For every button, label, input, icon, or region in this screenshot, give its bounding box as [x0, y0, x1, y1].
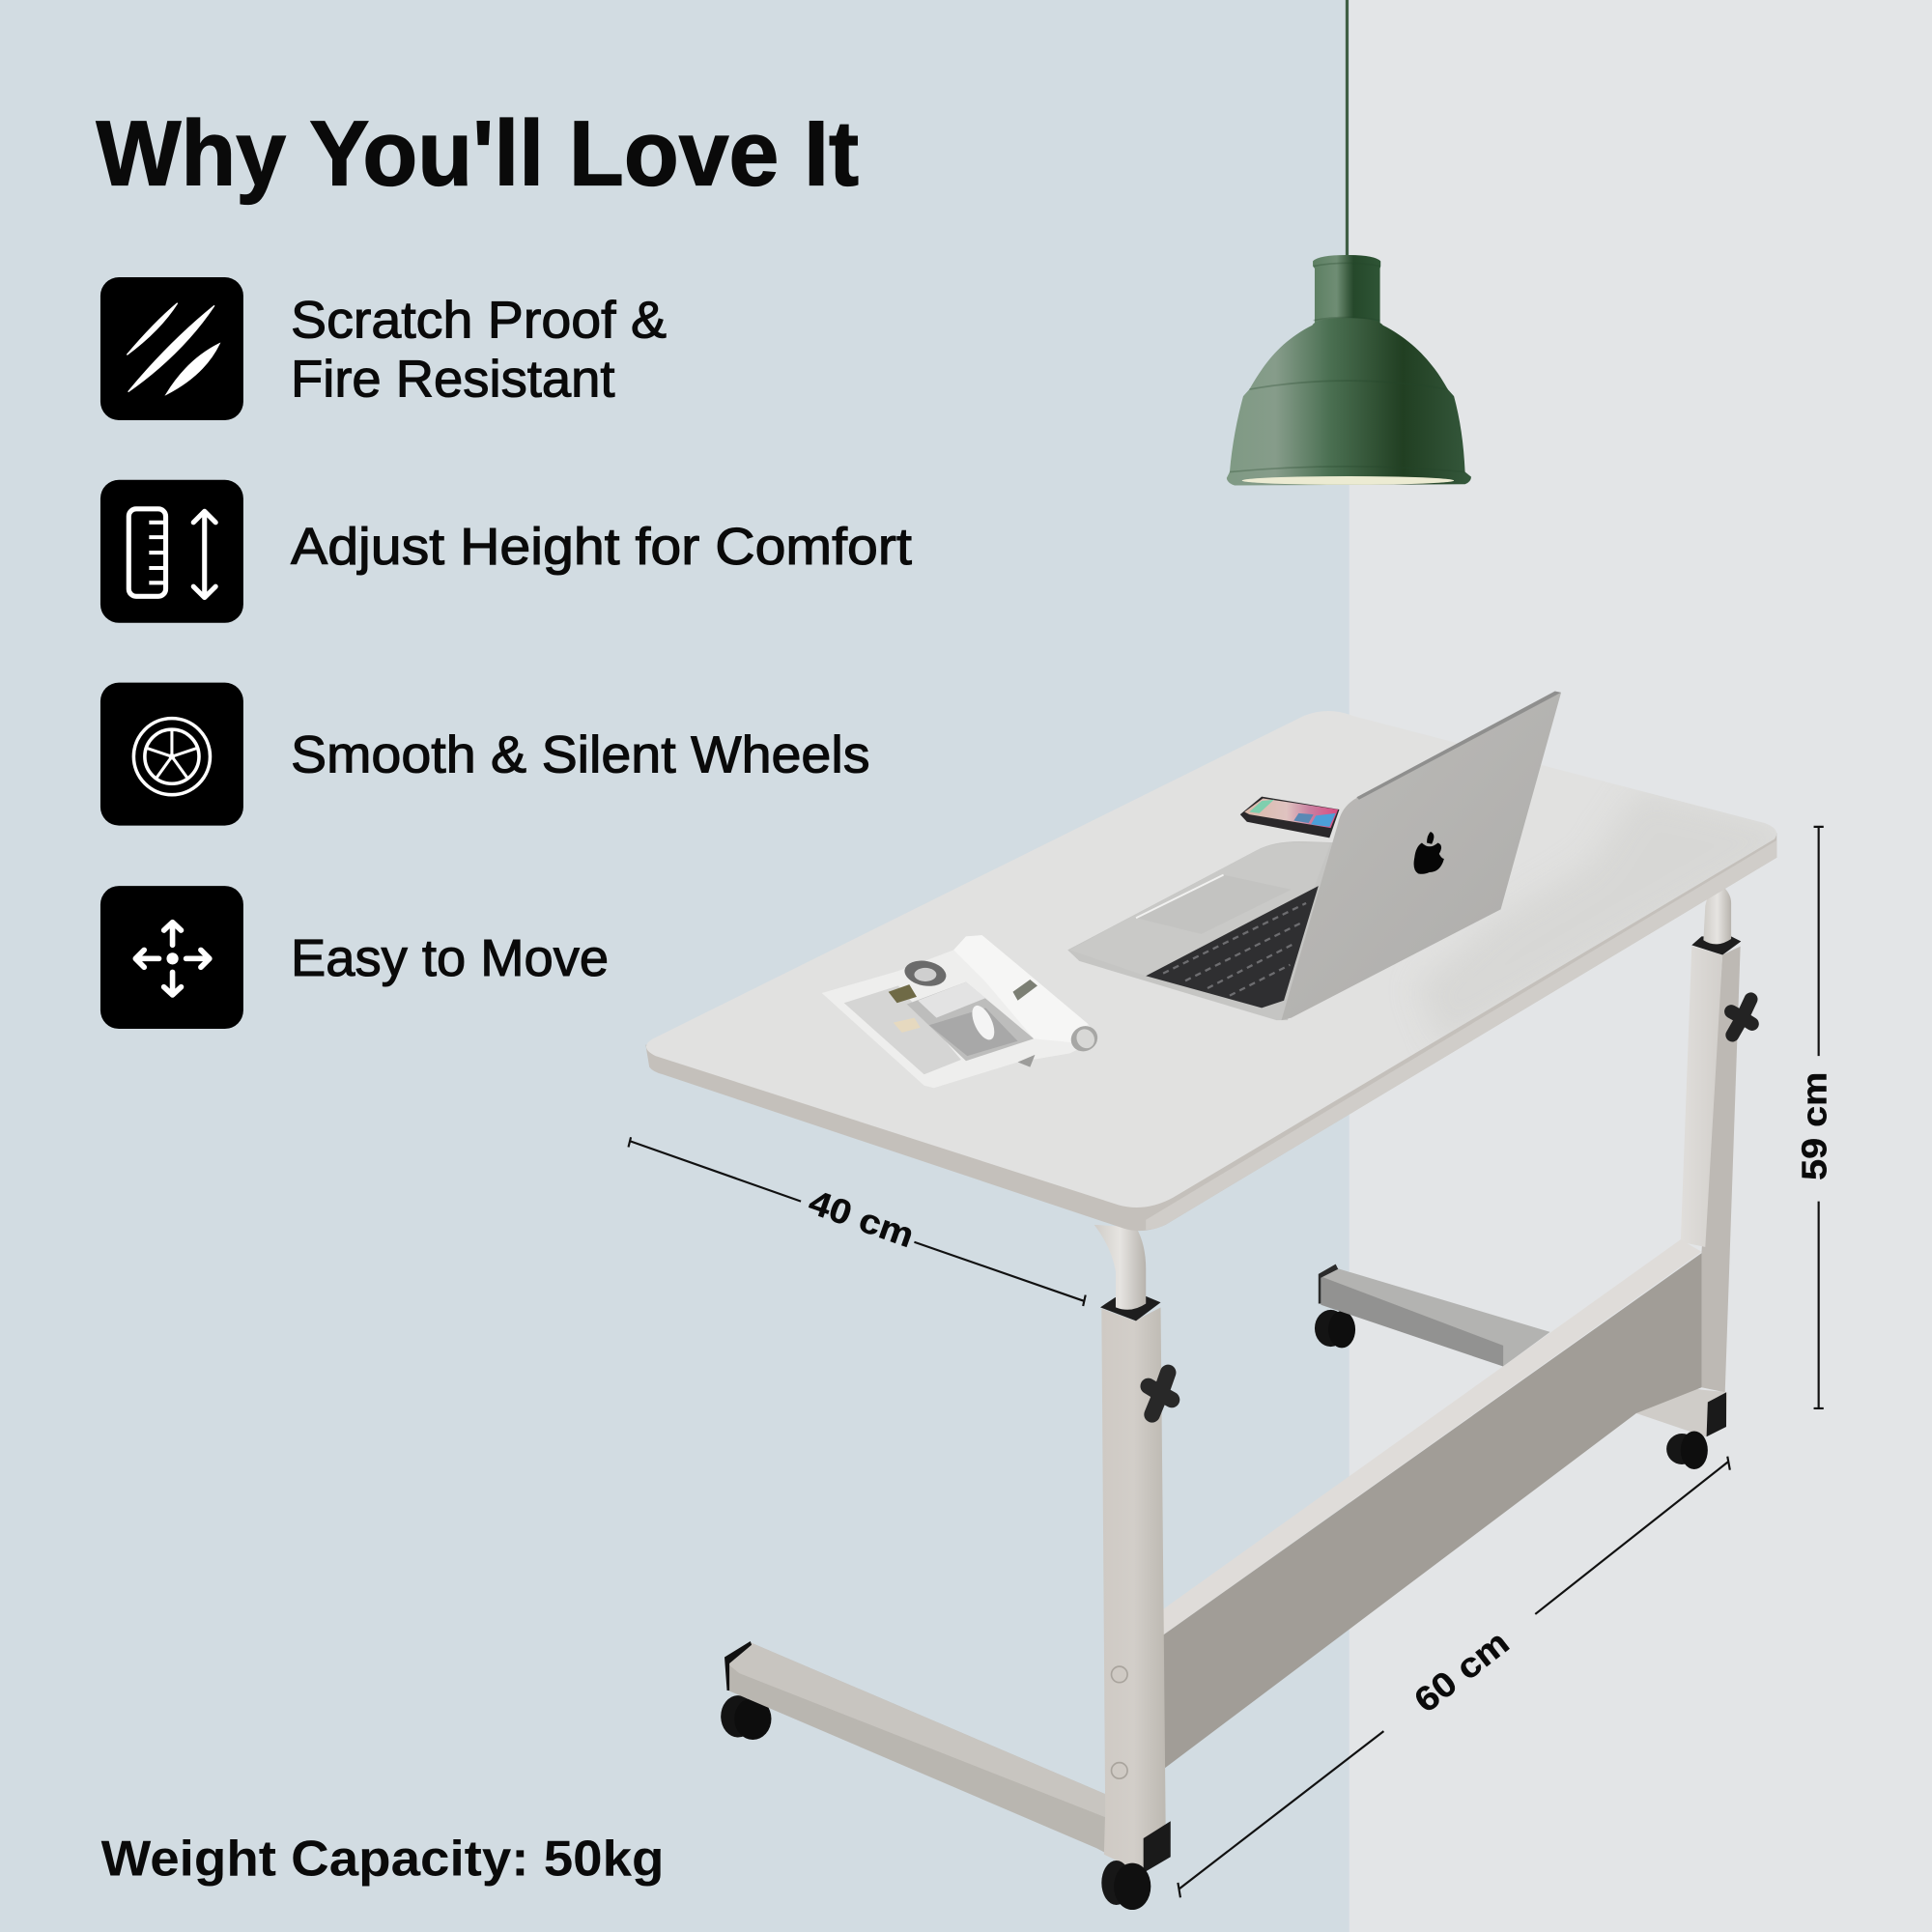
feature: scratch proof — [100, 277, 667, 420]
icon: scratches — [100, 277, 243, 420]
feature text: scratch proof and fire resistant — [291, 292, 667, 409]
title: Why You'll Love It — [96, 101, 859, 205]
right leg knob — [1731, 999, 1752, 1035]
dimension: 40 cm: 40 cm — [804, 1182, 919, 1255]
table surface — [646, 711, 1776, 1208]
dimension: 60 cm: 60 cm — [1406, 1623, 1517, 1720]
feature: wheels — [100, 683, 870, 826]
lamp neck — [1313, 255, 1380, 323]
feature: adjustable height — [100, 480, 912, 623]
bolts — [1112, 1666, 1127, 1683]
table top — [645, 711, 1786, 1231]
table edge — [645, 833, 1776, 1231]
background: light grey right panel — [1350, 0, 1932, 1932]
laptop lid — [1282, 693, 1561, 1020]
weight capacity note: Weight Capacity: 50kg — [101, 1831, 664, 1887]
front leg knob — [1149, 1373, 1172, 1414]
lamp shade — [1227, 318, 1471, 486]
apple logo — [1414, 832, 1444, 874]
front crossbeam — [1163, 1239, 1701, 1770]
dimension: 59 cm — [1795, 827, 1833, 1408]
rear telescopic tube and cap — [1691, 887, 1741, 955]
table surface reflection — [1435, 806, 1768, 1024]
lamp cord — [1346, 0, 1349, 256]
dimension: 40 cm — [629, 1137, 1086, 1306]
icon: wheel — [100, 683, 243, 826]
desk illustration — [645, 692, 1786, 1910]
lamp light — [1242, 476, 1454, 485]
laptop base — [1067, 841, 1343, 1020]
icon: four-way arrows — [100, 886, 243, 1029]
dimension: 60 cm — [1178, 1457, 1730, 1897]
feature text: easy to move: Easy to Move — [291, 930, 609, 987]
front floor bar and caster — [721, 1641, 1144, 1873]
feature: easy to move — [100, 886, 609, 1029]
laptop — [1067, 692, 1561, 1020]
phone — [1240, 797, 1339, 838]
feature list — [100, 277, 912, 1029]
back crossbar and caster — [1315, 1264, 1550, 1367]
keyboard — [1146, 886, 1319, 1008]
dimension: 59 cm: 59 cm — [1795, 1072, 1833, 1180]
open magazine — [822, 935, 1102, 1088]
feature text: adjust height: Adjust Height for Comfort — [291, 519, 912, 576]
right rear leg and foot — [1636, 947, 1752, 1469]
icon: ruler and vertical arrow — [100, 480, 243, 623]
trackpad — [1136, 875, 1292, 934]
pendant lamp — [1227, 0, 1471, 486]
front leg — [1101, 1307, 1172, 1910]
front telescopic tube and cap — [1094, 1225, 1161, 1321]
feature text: scratch proof and fire resistant: Fire Resistant — [291, 352, 615, 409]
feature text: wheels: Smooth & Silent Wheels — [291, 727, 870, 784]
feature text: scratch proof and fire resistant: Scratch Proof & — [291, 292, 667, 349]
background: blue-grey left panel — [0, 0, 1350, 1932]
